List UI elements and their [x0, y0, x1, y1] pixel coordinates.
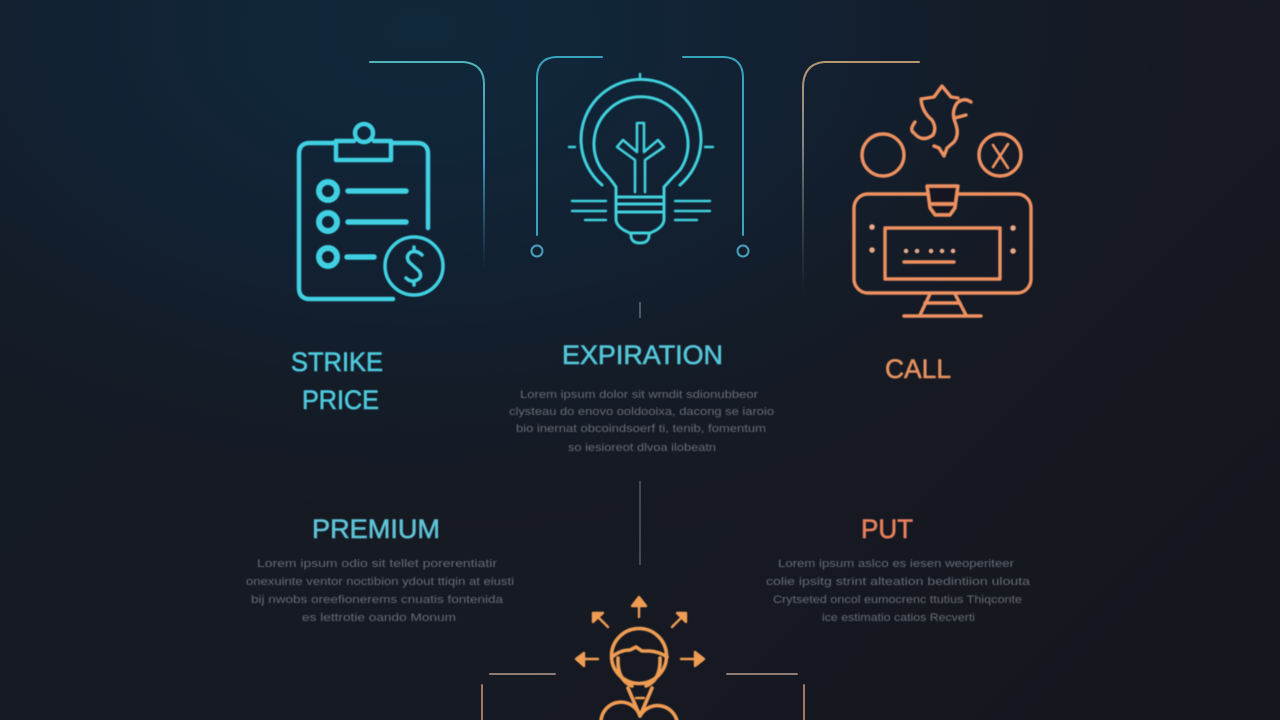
icon: light bulb	[569, 74, 713, 243]
text block: put: colie ipsitg strint alteation bedintiion ulouta	[766, 576, 1031, 588]
heading: expiration: EXPIRATION	[562, 340, 723, 370]
text block: put: ice estimatio catios Recverti	[822, 612, 975, 624]
text block: expiration	[509, 389, 774, 454]
panel: expiration	[509, 57, 774, 454]
panel: strike price	[291, 62, 484, 415]
icon: person with arrows	[576, 597, 704, 720]
text block: put	[766, 558, 1031, 624]
connector: central divider	[639, 481, 641, 565]
panel: put	[766, 514, 1031, 624]
connector: upper divider	[639, 302, 641, 318]
text block: expiration: Lorem ipsum dolor sit wmdit sdionubbeor	[520, 389, 758, 401]
heading: strike price: PRICE	[302, 385, 379, 415]
heading: strike price: STRIKE	[291, 347, 383, 377]
text block: premium: bij nwobs oreefionerems cnuatis fontenida	[251, 594, 504, 606]
icon: monitor with symbols	[854, 86, 1031, 316]
frame: strike price	[370, 62, 484, 270]
frame: expiration	[532, 57, 748, 256]
text block: put: Lorem ipsum aslco es iesen weoperiteer	[778, 558, 1014, 570]
heading: put: PUT	[861, 514, 913, 544]
panel: call	[803, 62, 1031, 384]
text block: put: Crytseted oncol eumocrenc ttutius Thiqconte	[773, 594, 1022, 606]
frame: person decision	[482, 674, 804, 720]
panel: person decision	[482, 597, 804, 720]
text block: premium	[246, 558, 514, 624]
text block: premium: es lettrotie oando Monum	[302, 612, 456, 624]
text block: expiration: clysteau do enovo ooldooixa, dacong se iaroio	[509, 406, 774, 418]
text block: expiration: so iesioreot dlvoa ilobeatn	[568, 442, 716, 454]
text block: premium: Lorem ipsum odio sit tellet porerentiatir	[257, 558, 497, 570]
text block: expiration: bio inernat obcoindsoerf ti, tenib, fomentum	[516, 423, 766, 435]
heading: strike price	[291, 347, 383, 415]
heading: call: CALL	[885, 354, 951, 384]
panel: premium	[246, 514, 514, 624]
heading: premium: PREMIUM	[312, 514, 440, 544]
text block: premium: onexuinte ventor noctibion ydout ttiqin at eiusti	[246, 576, 514, 588]
icon: clipboard with dollar	[299, 124, 443, 299]
frame: call	[803, 62, 919, 295]
